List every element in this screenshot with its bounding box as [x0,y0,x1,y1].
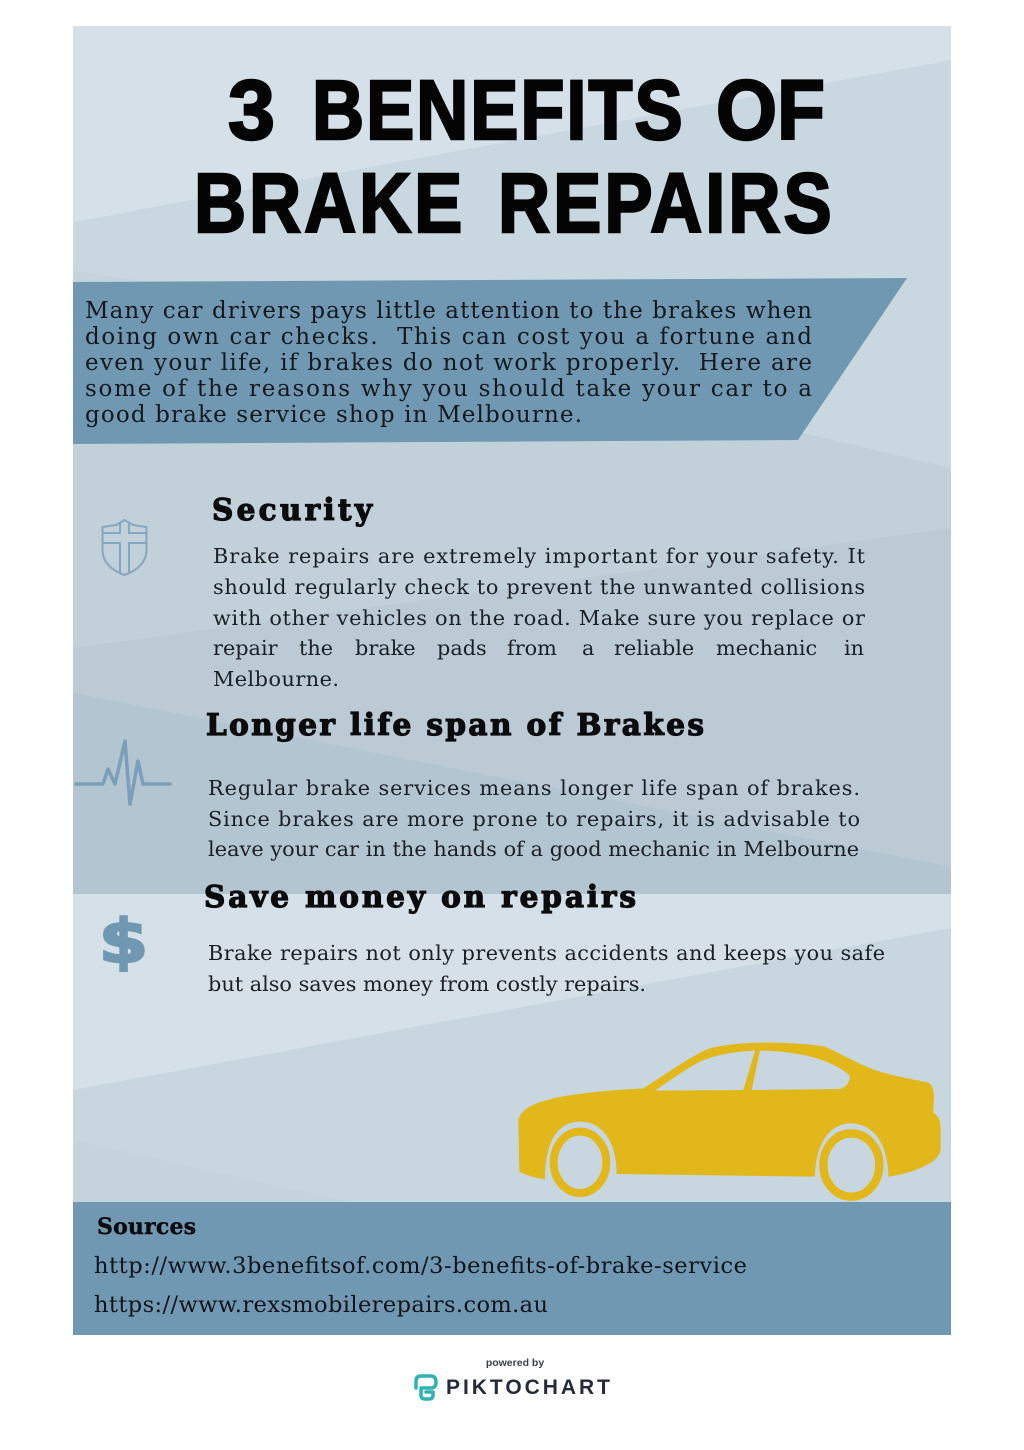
text block: longer life: Regular brake services means longer life span of brakes. [208,776,860,800]
text block: security: should regularly check to prevent the unwanted collisions [213,575,865,599]
title: REPAIRS [498,156,832,250]
text block: intro: some of the reasons why you should take your car to a [85,376,812,402]
text block: security: with other vehicles on the road. Make sure you replace or [213,606,865,630]
text block: save money: Brake repairs not only prevents accidents and keeps you safe [208,941,885,965]
panel: intro banner [73,278,907,444]
text block: intro: good brake service shop in Melbourne. [85,402,582,428]
icon: yellow car [518,1043,941,1197]
logo wordmark: PIKTOCHART [446,1376,610,1399]
car windows [655,1051,850,1091]
text block: security: Brake repairs are extremely important for your safety. It [213,544,866,568]
text block: intro: Many car drivers pays little attention to the brakes when [85,298,812,324]
icon: dollar sign: $ [99,907,148,977]
title: BENEFITS [312,63,683,157]
panel: sources [73,1202,951,1335]
text block: intro [85,298,812,428]
text block: security: Melbourne. [213,667,339,691]
title: OF [716,63,825,157]
heading: Longer life span of Brakes: Longer life span of Brakes [206,707,704,742]
text block: save money [208,941,885,996]
text block: security: from [507,636,557,660]
footer: piktochart logo [416,1357,610,1399]
text block: security: brake [355,636,416,660]
text block: longer life: Since brakes are more prone to repairs, it is advisable to [208,807,860,831]
text block: security: mechanic [716,636,817,660]
text block: security [213,544,866,691]
text block: intro: doing own car checks. This can cost you a fortune and [85,324,812,350]
source links: https://www.rexsmobilerepairs.com.au [94,1292,548,1318]
heading: Save money on repairs: Save money on repairs [204,879,636,914]
text block: longer life [208,776,860,861]
heading: Security: Security [212,492,373,527]
icon: shield with cross [102,520,146,575]
logo icon [416,1376,436,1399]
text block: security: the [299,636,333,660]
source links: http://www.3benefitsof.com/3-benefits-of-brake-service [94,1253,747,1279]
text block: security: pads [437,636,487,660]
text block: security: in [844,636,864,660]
panel: background [73,26,951,1335]
sources heading: Sources [97,1214,196,1240]
text block: security: reliable [614,636,694,660]
title: BRAKE [194,156,462,250]
text block: intro: even your life, if brakes do not work properly. Here are [85,350,812,376]
title [194,63,832,250]
source links [94,1253,747,1318]
text block: save money: but also saves money from costly repairs. [208,972,646,996]
icon: heartbeat line [76,741,170,804]
text block: longer life: leave your car in the hands of a good mechanic in Melbourne [208,837,859,861]
text block: security: repair [213,636,278,660]
footer: piktochart logo: powered by [486,1357,544,1369]
text block: security: a [582,636,594,660]
rear wheel [823,1133,879,1197]
title: 3 [228,63,275,157]
front wheel [554,1132,606,1193]
